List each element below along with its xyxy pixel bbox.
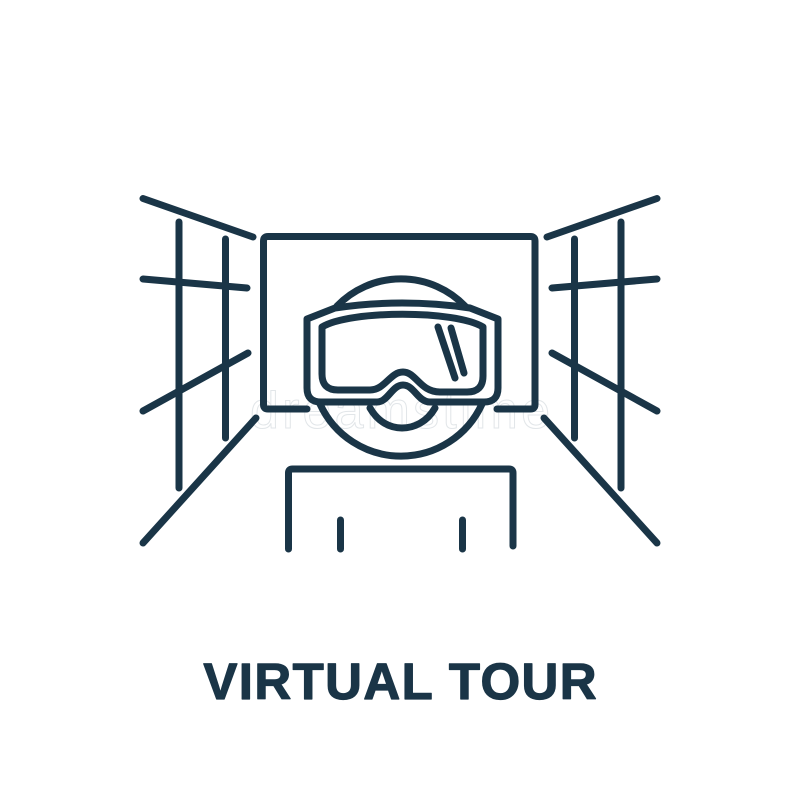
back wall frame	[264, 236, 535, 409]
icon: virtual tour room and VR user	[143, 198, 657, 549]
body	[288, 469, 513, 549]
watermark: dreamstime	[250, 382, 550, 440]
head	[320, 279, 482, 456]
right wall grid	[544, 198, 657, 543]
VR goggles	[307, 303, 498, 402]
title: VIRTUAL TOUR	[203, 653, 598, 710]
smile	[370, 408, 435, 428]
left wall grid	[143, 198, 256, 543]
